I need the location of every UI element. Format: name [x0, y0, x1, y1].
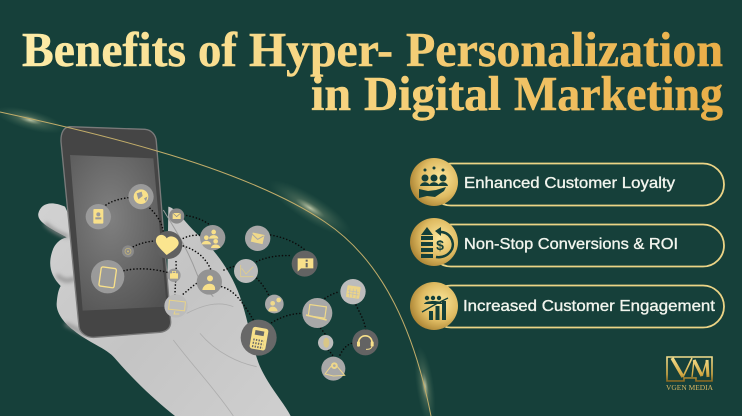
icon: tablet: [91, 260, 124, 293]
icon: user: [197, 269, 222, 295]
icon: calendar: [340, 279, 366, 304]
panel: Increased Customer Engagement: Increased Customer Engagement: [463, 298, 716, 315]
title: Benefits: [22, 22, 186, 77]
title: Marketing: [514, 66, 723, 121]
network icons: [86, 184, 378, 381]
icon: headset: [352, 329, 378, 355]
icon: engagement growth chart: [422, 296, 448, 320]
icon: calculator phone: [241, 320, 277, 356]
icon: conversions stack and dollar: $: [436, 237, 444, 253]
icon: small mail: [169, 208, 184, 224]
decorative gold arc with glows: [0, 101, 439, 416]
title: of: [198, 22, 238, 77]
icon: envelope: [245, 226, 270, 251]
logo: VGEN Media: [666, 357, 713, 392]
panel: Enhanced Customer Loyalty: Enhanced Customer Loyalty: [464, 175, 675, 192]
panel: Non-Stop Conversions & ROI: [410, 218, 724, 266]
icon: bag: [167, 269, 181, 282]
title: in: [311, 66, 351, 121]
icon: info: [292, 251, 318, 277]
title: Personalization: [406, 22, 723, 77]
panel: Increased Customer Engagement: [410, 282, 724, 330]
icon: monitor: [164, 294, 188, 318]
icon: target: [122, 245, 134, 257]
icon: two users: [265, 295, 284, 313]
title: Digital: [364, 66, 501, 121]
panel: Enhanced Customer Loyalty: [410, 158, 724, 206]
dotted connectors: [106, 198, 366, 357]
icon: laptop: [302, 298, 332, 328]
phone: [61, 127, 171, 337]
icon: people group: [200, 225, 225, 250]
icon: fingerprint: [318, 335, 333, 350]
title: [22, 22, 723, 121]
illustration: hand holding phone with network icons: [38, 127, 378, 416]
panel: Non-Stop Conversions & ROI: Non-Stop Conversions & ROI: [464, 236, 678, 253]
icon: conversions stack and dollar: [421, 227, 453, 258]
icon: line chart: [234, 259, 258, 283]
icon: heart: [154, 231, 182, 259]
icon: location: [321, 357, 345, 381]
hand: [38, 203, 291, 416]
logo: VGEN Media: VGEN MEDIA: [666, 384, 713, 392]
icon: loyalty people and hand: [419, 166, 448, 198]
icon: address book: [86, 204, 111, 229]
icon: globe: [128, 184, 154, 209]
title: Hyper-: [249, 22, 393, 77]
